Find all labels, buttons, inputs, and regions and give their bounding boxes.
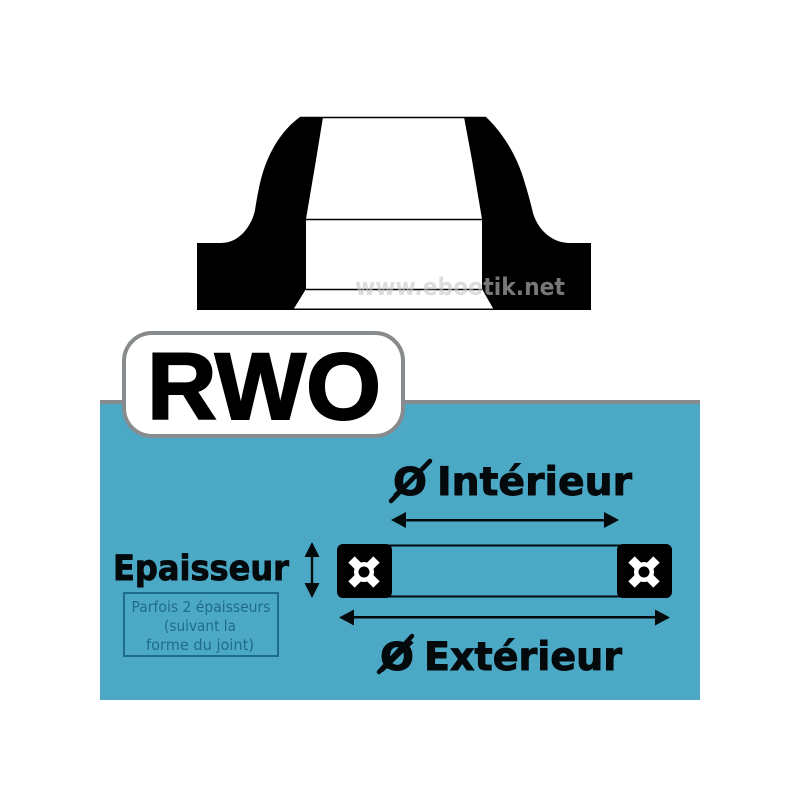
ring section diagram xyxy=(337,544,672,598)
thickness label: Epaisseur xyxy=(113,549,290,589)
ring section left xyxy=(337,544,392,598)
outer diameter label: Extérieur xyxy=(424,635,623,680)
ring section right xyxy=(617,544,672,598)
thickness note box: (suivant la xyxy=(164,617,236,635)
seal cross-section diagram xyxy=(197,117,591,310)
RWO title: RWO xyxy=(147,334,381,440)
inner diameter label: Intérieur xyxy=(437,460,633,505)
outer diameter arrow xyxy=(339,610,670,626)
thickness note box xyxy=(124,593,278,656)
blue dimensions panel xyxy=(100,400,700,700)
thickness arrow xyxy=(304,542,320,598)
seal profile right xyxy=(464,117,591,310)
inner diameter arrow xyxy=(391,512,619,528)
outer diameter label: Ø xyxy=(380,635,414,679)
seal profile left xyxy=(197,117,323,310)
watermark: www.ebootik.net xyxy=(355,273,565,301)
inner diameter label: Ø xyxy=(393,460,427,504)
thickness note box: Parfois 2 épaisseurs xyxy=(132,598,271,616)
ring edges xyxy=(385,546,625,596)
seal horizontal edges xyxy=(293,118,494,309)
thickness note box: forme du joint) xyxy=(146,636,254,654)
RWO label box xyxy=(124,333,403,440)
